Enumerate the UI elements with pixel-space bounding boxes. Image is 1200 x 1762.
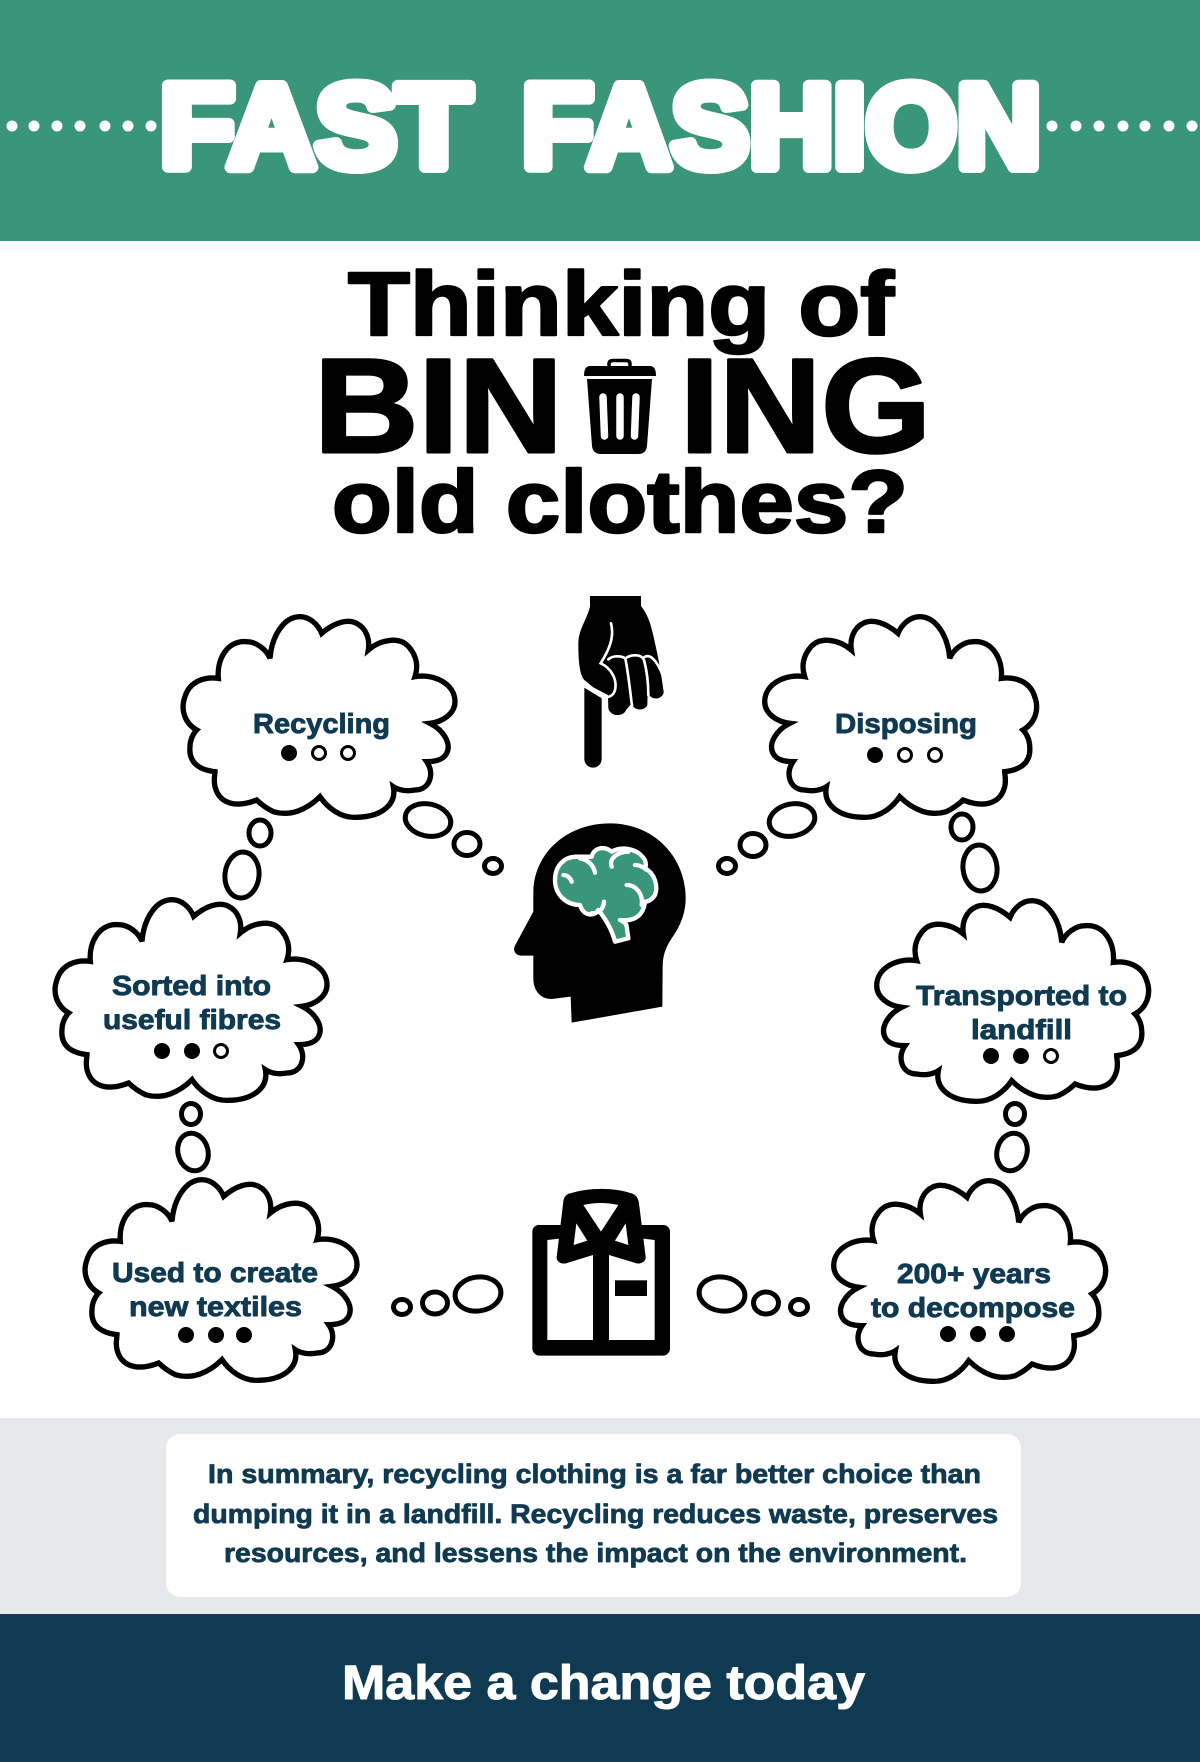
heading BIN: BIN (314, 332, 563, 481)
cloud: sorted into useful fibres: useful fibres (103, 1004, 281, 1035)
cloud: used to create new textiles: Used to create (112, 1257, 318, 1288)
thought bubbles: disposing to transported (951, 814, 999, 893)
cloud: recycling (183, 617, 455, 817)
cloud: transported to landfill (877, 901, 1149, 1101)
dotted line left (6, 120, 156, 132)
summary band (0, 1418, 1200, 1614)
heading ING: ING (680, 332, 931, 481)
icon: head with brain (514, 823, 686, 1023)
progress dots (983, 1048, 1058, 1064)
cloud: transported to landfill: Transported to (916, 980, 1127, 1011)
heading (314, 255, 931, 551)
summary text: resources, and lessens the impact on the environment. (224, 1538, 967, 1568)
heading line 1: Thinking of (348, 255, 895, 355)
progress dots (867, 747, 942, 763)
thought bubbles: decompose to shirt (697, 1274, 808, 1314)
summary text (193, 1459, 998, 1568)
summary text: In summary, recycling clothing is a far better choice than (208, 1459, 981, 1489)
icon: shirt (532, 1189, 670, 1356)
title: FAST (160, 61, 471, 193)
thought bubbles: transported to decompose (993, 1104, 1031, 1174)
icon: trash can (584, 360, 656, 454)
title: FASHION (522, 61, 1041, 193)
dotted line right (1046, 120, 1198, 132)
thought bubbles: used to shirt (394, 1274, 503, 1314)
progress dots (154, 1043, 228, 1059)
footer band (0, 1614, 1200, 1762)
cloud: 200+ years to decompose (834, 1181, 1106, 1381)
cloud: used to create new textiles: new textiles (129, 1291, 302, 1322)
progress dots (940, 1326, 1015, 1342)
thought bubbles: recycling to head (402, 800, 502, 874)
icon: pointing hand (578, 596, 664, 768)
cloud: transported to landfill: landfill (971, 1014, 1072, 1045)
summary card (166, 1434, 1021, 1597)
footer text: Make a change today (342, 1657, 865, 1710)
header band (0, 0, 1200, 241)
brain (555, 848, 656, 942)
summary text: dumping it in a landfill. Recycling reduces waste, preserves (193, 1499, 998, 1529)
progress dots (281, 745, 354, 761)
thought bubbles: sorted to used (174, 1104, 212, 1174)
cloud: sorted into useful fibres (55, 900, 327, 1100)
title (160, 61, 1041, 193)
cloud: recycling: Recycling (253, 708, 390, 739)
thought bubbles: disposing to head (718, 800, 818, 874)
thought bubbles: recycling to sorted (223, 820, 271, 900)
heading line 3: old clothes? (332, 452, 908, 551)
cloud: disposing (765, 617, 1037, 817)
cloud: used to create new textiles (85, 1180, 357, 1380)
progress dots (178, 1327, 252, 1343)
cloud: disposing: Disposing (835, 708, 977, 739)
cloud: 200+ years to decompose: to decompose (871, 1292, 1075, 1323)
cloud: sorted into useful fibres: Sorted into (112, 970, 271, 1001)
cloud: 200+ years to decompose: 200+ years (897, 1258, 1051, 1289)
